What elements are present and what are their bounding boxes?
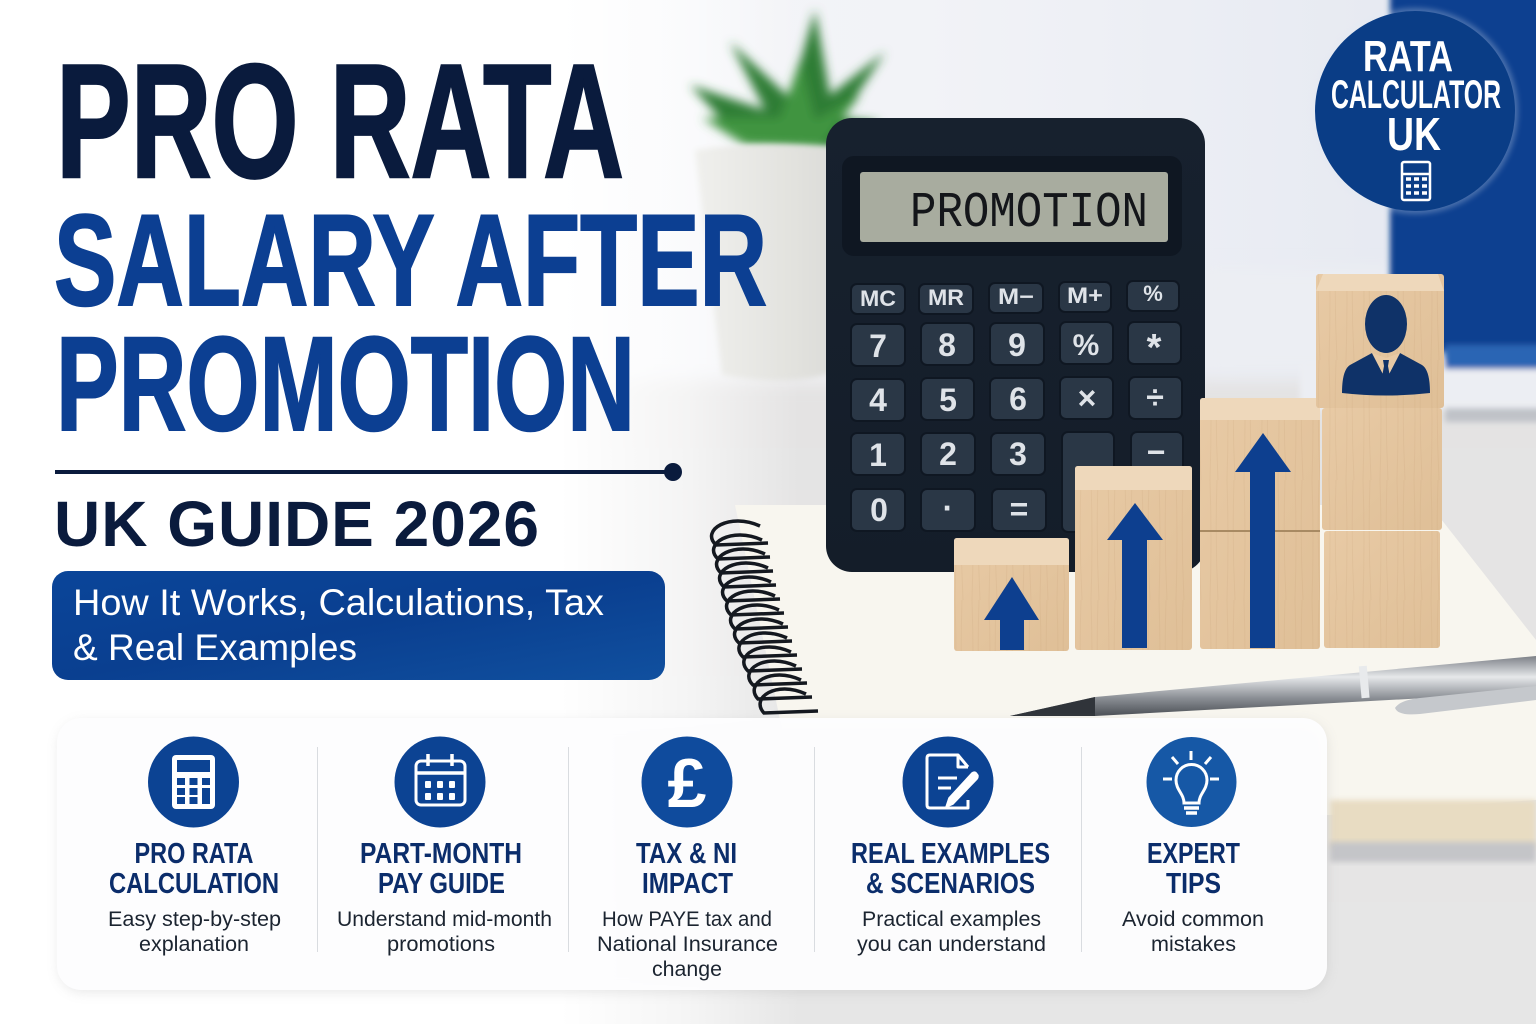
plant leaves bbox=[690, 10, 885, 148]
keypad: % bbox=[1073, 329, 1099, 362]
feature: tax and NI impact bbox=[597, 736, 778, 981]
blue folder bbox=[1300, 0, 1536, 422]
icon: calendar bbox=[416, 754, 465, 805]
person icon bbox=[1342, 295, 1430, 396]
keypad: * bbox=[1147, 327, 1162, 369]
block 4 stack bbox=[1316, 274, 1444, 648]
icon: light bulb bbox=[1163, 751, 1219, 813]
keypad: MC bbox=[860, 286, 896, 311]
badge calculator icon bbox=[1402, 162, 1430, 200]
feature: part-month pay guide bbox=[337, 736, 552, 956]
feature: tax and NI impact: IMPACT bbox=[642, 868, 733, 900]
keypad: 7 bbox=[869, 328, 887, 364]
subtitle pill bbox=[52, 571, 665, 680]
feature: part-month pay guide: Understand mid-month bbox=[337, 908, 552, 931]
feature: pro rata calculation bbox=[108, 736, 281, 956]
keypad: − bbox=[1147, 434, 1165, 470]
subtitle pill: & Real Examples bbox=[73, 627, 357, 668]
feature: expert tips bbox=[1122, 737, 1264, 956]
keypad: 3 bbox=[1009, 436, 1027, 472]
block 2 with arrow bbox=[1075, 466, 1192, 650]
keypad: M− bbox=[998, 284, 1034, 309]
pen bbox=[1010, 656, 1536, 716]
title: SALARY AFTER bbox=[54, 187, 767, 333]
feature: real examples: REAL EXAMPLES bbox=[851, 838, 1050, 870]
feature: pro rata calculation: PRO RATA bbox=[134, 838, 254, 870]
feature: real examples: & SCENARIOS bbox=[866, 868, 1035, 900]
keypad: M+ bbox=[1067, 283, 1103, 308]
feature: real examples bbox=[851, 736, 1050, 956]
feature: pro rata calculation: CALCULATION bbox=[109, 868, 279, 900]
feature: pro rata calculation: explanation bbox=[139, 933, 249, 956]
keypad: 8 bbox=[938, 327, 956, 363]
keypad: 5 bbox=[939, 382, 957, 418]
block 3 with arrow bbox=[1200, 398, 1320, 649]
keypad: 2 bbox=[939, 436, 957, 472]
feature: tax and NI impact: change bbox=[652, 958, 722, 981]
keypad bbox=[851, 281, 1183, 532]
title bbox=[54, 31, 767, 459]
keypad: % bbox=[1143, 281, 1163, 306]
badge bbox=[1312, 8, 1518, 214]
block 1 with arrow bbox=[954, 538, 1069, 651]
display: PROMOTION bbox=[910, 185, 1148, 242]
feature: pro rata calculation: Easy step-by-step bbox=[108, 908, 281, 931]
icon: pound sign: £ bbox=[668, 744, 707, 822]
keypad: = bbox=[1010, 491, 1028, 527]
feature: real examples: you can understand bbox=[857, 933, 1046, 956]
feature: expert tips: Avoid common bbox=[1122, 908, 1264, 931]
notebook spiral bbox=[712, 521, 818, 713]
calculator bbox=[826, 118, 1205, 572]
badge: UK bbox=[1387, 108, 1441, 160]
subtitle pill: How It Works, Calculations, Tax bbox=[73, 582, 605, 623]
keypad: 6 bbox=[1009, 381, 1027, 417]
keypad: 4 bbox=[869, 382, 887, 418]
feature: expert tips: TIPS bbox=[1166, 868, 1221, 900]
keypad: × bbox=[1078, 380, 1096, 416]
feature: tax and NI impact: TAX & NI bbox=[636, 838, 737, 870]
left white fade bbox=[0, 0, 800, 1024]
feature: part-month pay guide: PAY GUIDE bbox=[378, 868, 505, 900]
keypad: ÷ bbox=[1146, 379, 1164, 415]
display bbox=[842, 156, 1182, 256]
feature: real examples: Practical examples bbox=[862, 908, 1041, 931]
feature: tax and NI impact: National Insurance bbox=[597, 933, 778, 956]
keypad: MR bbox=[928, 285, 964, 310]
icon: calculator bbox=[172, 755, 215, 809]
feature: expert tips: mistakes bbox=[1151, 933, 1236, 956]
feature: tax and NI impact: How PAYE tax and bbox=[602, 908, 772, 931]
keypad: 0 bbox=[870, 492, 888, 528]
keypad: 9 bbox=[1008, 327, 1026, 363]
icon: document and pencil bbox=[927, 755, 978, 808]
growth blocks bbox=[954, 274, 1444, 651]
title divider with dot bbox=[55, 463, 682, 481]
feature: part-month pay guide: promotions bbox=[387, 933, 495, 956]
plant pot bbox=[690, 10, 885, 381]
title: PROMOTION bbox=[56, 310, 635, 459]
subtitle: UK GUIDE 2026 bbox=[54, 488, 539, 560]
feature: part-month pay guide: PART-MONTH bbox=[360, 838, 522, 870]
keypad: · bbox=[943, 490, 953, 526]
keypad: 1 bbox=[869, 437, 887, 473]
title: PRO RATA bbox=[56, 31, 624, 212]
feature: expert tips: EXPERT bbox=[1147, 838, 1240, 870]
notebook bbox=[712, 505, 1536, 862]
feature panel bbox=[57, 718, 1327, 992]
badge: RATA bbox=[1363, 32, 1453, 81]
